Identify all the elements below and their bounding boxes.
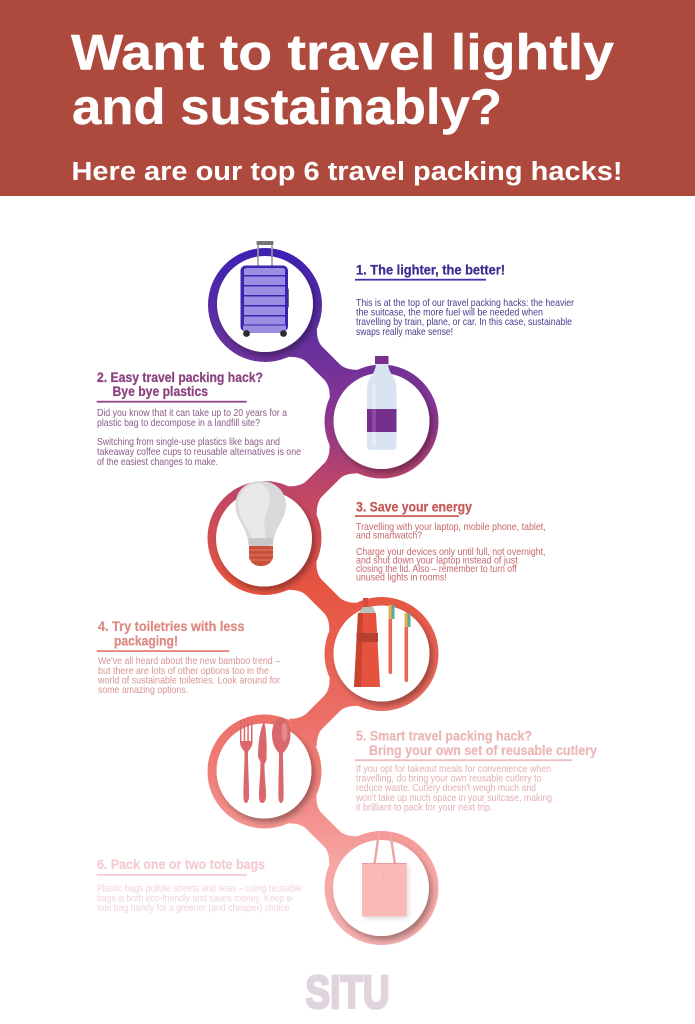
title	[71, 24, 614, 135]
body 2: plastic bag to decompose in a landfill site?	[97, 418, 260, 429]
timeline chain	[208, 248, 438, 945]
body 5: reduce waste. Cutlery doesn't weigh much and	[356, 783, 536, 794]
body 1: This is at the top of our travel packing hacks: the heavier	[356, 298, 575, 309]
body 1: swaps really make sense!	[356, 327, 453, 338]
heading 5: 5. Smart travel packing hack?	[356, 729, 532, 744]
body 5: If you opt for takeout meals for convenience when	[356, 764, 551, 775]
body 4	[97, 656, 281, 696]
body 2: Did you know that it can take up to 20 years for a	[97, 408, 287, 419]
body 1: travelling by train, plane, or car. In this case, sustainable	[356, 317, 572, 328]
body 2	[97, 408, 301, 468]
step 1 text	[355, 262, 575, 338]
step 6 text	[97, 857, 302, 914]
body 6: bags is both eco-friendly and saves money. Keep a-	[97, 893, 294, 904]
title: and sustainably?	[72, 79, 502, 135]
heading 4: packaging!	[114, 634, 178, 649]
body 3: unused lights in rooms!	[356, 572, 447, 583]
step 3 text	[355, 500, 546, 583]
icon: cutlery	[240, 718, 290, 803]
heading 5	[356, 729, 597, 758]
body 6	[97, 884, 302, 914]
heading 4: 4. Try toiletries with less	[98, 619, 244, 634]
icon: water bottle	[367, 356, 396, 450]
icon: toothpaste and toothbrushes	[354, 598, 410, 687]
body 3: and smartwatch?	[356, 530, 422, 542]
heading 2	[97, 370, 263, 399]
body 2: Switching from single-use plastics like bags and	[97, 437, 280, 448]
body 4: but there are lots of other options too in the	[98, 666, 269, 677]
icon: suitcase	[240, 241, 289, 337]
body 3	[356, 522, 546, 583]
body 1	[356, 298, 575, 338]
icon: light bulb	[236, 481, 286, 566]
body 3: Charge your devices only until full, not overnight,	[356, 547, 546, 558]
body 3: and shut down your laptop instead of just	[356, 556, 518, 566]
body 4: some amazing options.	[98, 685, 188, 696]
heading 1: 1. The lighter, the better!	[356, 262, 505, 278]
body 6: tote bag handy for a greener (and cheaper) choice.	[97, 903, 292, 914]
body 2: takeaway coffee cups to reusable alternatives is one	[97, 447, 301, 458]
heading 3: 3. Save your energy	[356, 500, 472, 515]
body 2: of the easiest changes to make.	[97, 457, 218, 468]
body 6: Plastic bags pollute streets and seas – using reusable	[97, 884, 302, 895]
title: Want to travel lightly	[71, 24, 614, 80]
heading 5: Bring your own set of reusable cutlery	[369, 743, 597, 758]
logo: SITU	[306, 966, 390, 1018]
body 5: won't take up much space in your suitcase, making	[355, 793, 552, 804]
step 2 text	[97, 370, 301, 468]
step 4 text	[97, 619, 281, 696]
heading 2: Bye bye plastics	[112, 384, 208, 399]
white circles	[216, 256, 430, 936]
body 5: it brilliant to pack for your next trip.	[356, 802, 492, 814]
heading 4	[98, 619, 244, 649]
body 5	[355, 764, 552, 814]
body 5: travelling, do bring your own reusable cutlery to	[356, 774, 542, 784]
step 5 text	[355, 729, 597, 814]
body 3: Travelling with your laptop, mobile phone, tablet,	[356, 522, 546, 533]
body 1: the suitcase, the more fuel will be needed when	[356, 308, 543, 318]
icon: tote bag	[362, 832, 407, 916]
body 4: We've all heard about the new bamboo trend –	[98, 656, 280, 667]
body 3: closing the lid. Also – remember to turn off	[356, 564, 517, 575]
heading 2: 2. Easy travel packing hack?	[97, 370, 263, 385]
heading 6: 6. Pack one or two tote bags	[97, 857, 265, 872]
header banner	[0, 0, 695, 196]
subtitle: Here are our top 6 travel packing hacks!	[72, 158, 622, 186]
body 4: world of sustainable toiletries. Look around for	[97, 676, 281, 686]
